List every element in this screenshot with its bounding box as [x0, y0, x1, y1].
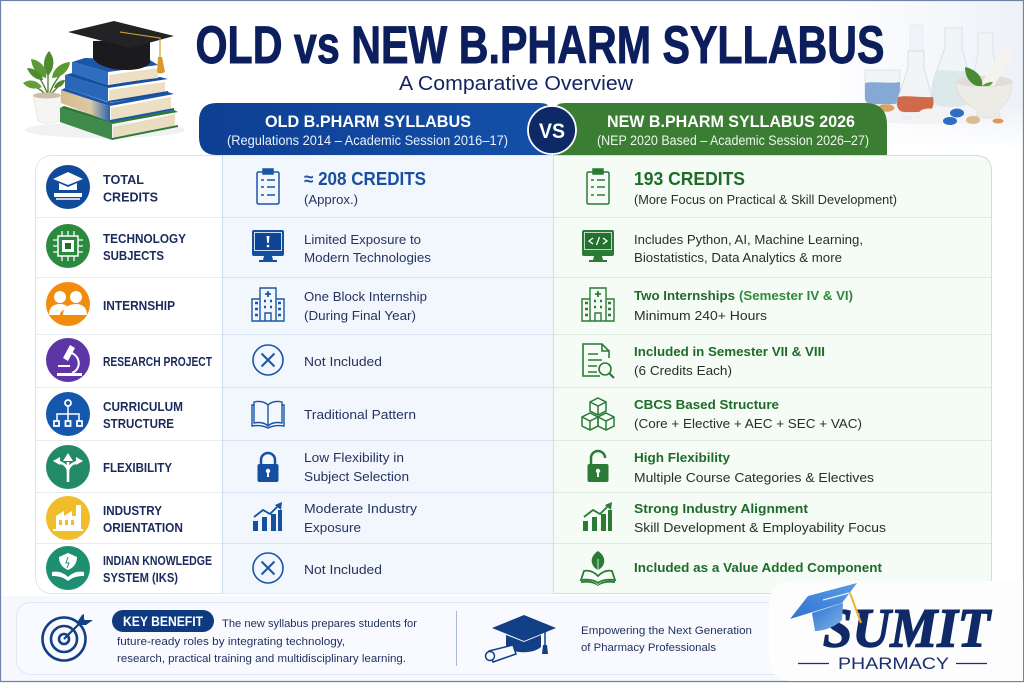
header: old syllabus — [199, 103, 552, 155]
red flask — [897, 51, 934, 112]
old value: One Block Internship — [304, 289, 427, 304]
icon: green hospital — [582, 288, 614, 321]
old value — [304, 289, 427, 323]
tall flask — [932, 28, 971, 106]
row: total credits — [46, 165, 897, 209]
icon: open book — [252, 401, 284, 428]
row: indian knowledge system — [46, 546, 883, 590]
row: industry orientation — [46, 496, 887, 540]
icon: blue hospital — [252, 288, 284, 321]
icon: green leaf and book — [581, 551, 615, 586]
logo subtitle: PHARMACY — [838, 654, 949, 673]
tagline — [581, 625, 752, 654]
new value — [634, 288, 853, 323]
label: INDIAN KNOWLEDGE — [103, 554, 212, 568]
old value — [304, 232, 432, 265]
new value: (6 Credits Each) — [634, 363, 732, 378]
wordmark: SUMIT — [823, 598, 992, 658]
label: SYSTEM (IKS) — [103, 571, 178, 585]
row: research project — [46, 338, 825, 382]
old value: Not Included — [304, 354, 382, 369]
new value: 193 CREDITS — [634, 169, 745, 189]
header: new syllabus: (NEP 2020 Based – Academic Session 2026–27) — [597, 133, 869, 148]
label: CURRICULUM — [103, 400, 183, 414]
key benefit badge: KEY BENEFIT — [123, 614, 204, 629]
key benefit text: The new syllabus prepares students for — [222, 618, 417, 630]
VS badge — [528, 106, 576, 154]
label: TOTAL — [103, 173, 144, 187]
label: STRUCTURE — [103, 417, 174, 431]
old value: (During Final Year) — [304, 308, 416, 323]
label — [103, 173, 158, 204]
label: RESEARCH PROJECT — [103, 355, 212, 369]
label — [103, 232, 187, 263]
key benefit text: research, practical training and multidisciplinary learning. — [117, 653, 406, 665]
comparison table panel — [36, 155, 992, 594]
new value: Minimum 240+ Hours — [634, 308, 768, 323]
icon: open lock — [588, 451, 608, 482]
icon: graduation cap on books — [46, 165, 90, 209]
label: CREDITS — [103, 190, 158, 204]
label: TECHNOLOGY — [103, 232, 187, 246]
new value — [634, 397, 862, 431]
new value: Two Internships — [634, 288, 735, 303]
graduation cap — [68, 21, 174, 74]
VS badge: VS — [539, 120, 565, 143]
icon: chip — [46, 224, 90, 268]
footer panel: key benefit — [16, 602, 816, 674]
old value: Exposure — [304, 520, 361, 535]
icon: green growth chart — [583, 502, 612, 531]
subtitle: A Comparative Overview — [399, 73, 634, 95]
icon: document search — [583, 344, 614, 378]
logo: Sumit Pharmacy — [769, 581, 1023, 681]
old value: ≈ 208 CREDITS — [304, 169, 426, 189]
old value: Subject Selection — [304, 469, 409, 484]
icon: leaf and book — [46, 546, 90, 590]
new value — [634, 169, 897, 207]
tagline: of Pharmacy Professionals — [581, 642, 717, 654]
old value: Moderate Industry — [304, 501, 418, 516]
old value: Low Flexibility in — [304, 450, 404, 465]
row: flexibility — [46, 445, 875, 489]
old value — [304, 501, 418, 535]
new value: Skill Development & Employability Focus — [634, 520, 887, 535]
icon: green clipboard — [587, 169, 609, 204]
faint cylinder — [910, 25, 923, 60]
icon: factory — [46, 496, 90, 540]
old value: Traditional Pattern — [304, 407, 416, 422]
new value: Strong Industry Alignment — [634, 501, 809, 516]
icon: cubes — [582, 398, 614, 430]
tagline: Empowering the Next Generation — [581, 625, 752, 637]
label: SUBJECTS — [103, 249, 164, 263]
label — [103, 504, 183, 535]
header: old syllabus: OLD B.PHARM SYLLABUS — [265, 112, 471, 131]
new value — [634, 501, 887, 535]
label — [103, 400, 183, 431]
new value: (Semester IV & VI) — [739, 288, 853, 303]
row: internship — [46, 282, 853, 326]
header: new syllabus — [553, 103, 887, 155]
old value: Not Included — [304, 562, 382, 577]
old value: Limited Exposure to — [304, 232, 421, 247]
icon: target with arrow — [42, 614, 93, 660]
icon: people — [46, 282, 90, 326]
label — [103, 554, 212, 585]
old value: (Approx.) — [304, 192, 358, 207]
new value: CBCS Based Structure — [634, 397, 779, 412]
new value: Included in Semester VII & VIII — [634, 344, 825, 359]
icon: not included — [253, 553, 283, 583]
key benefit text — [117, 618, 417, 665]
small flask — [973, 33, 998, 80]
key benefit badge — [112, 610, 214, 632]
key benefit text: future-ready roles by integrating technology, — [117, 636, 345, 648]
illustration: lab glassware, mortar and pills — [845, 25, 1015, 125]
new value — [634, 232, 863, 265]
label: INDUSTRY — [103, 504, 163, 518]
label: FLEXIBILITY — [103, 461, 173, 475]
logo graduation cap — [790, 583, 861, 631]
icon: closed lock — [258, 453, 278, 482]
icon: code monitor — [582, 230, 614, 262]
new value — [634, 344, 825, 378]
icon: microscope — [46, 338, 90, 382]
old value: Modern Technologies — [304, 250, 432, 265]
old value — [304, 450, 409, 484]
new value — [634, 450, 875, 485]
pills — [878, 104, 1004, 125]
stacked books — [60, 58, 178, 140]
new value: Included as a Value Added Component — [634, 560, 883, 575]
new value: Includes Python, AI, Machine Learning, — [634, 232, 863, 247]
icon: diverging arrows — [46, 445, 90, 489]
header: old syllabus: (Regulations 2014 – Academic Session 2016–17) — [227, 133, 508, 148]
new value: (More Focus on Practical & Skill Development) — [634, 192, 897, 207]
new value: High Flexibility — [634, 450, 731, 465]
plant pot and leaves — [23, 51, 70, 123]
icon: monitor with warning — [252, 230, 284, 262]
icon: blue growth chart — [253, 502, 282, 531]
label: ORIENTATION — [103, 521, 183, 535]
icon: not included — [253, 345, 283, 375]
illustration: books with graduation cap and plant — [23, 21, 185, 140]
icon: hierarchy — [46, 392, 90, 436]
old value — [304, 169, 426, 207]
icon: blue clipboard — [257, 169, 279, 204]
new value: (Core + Elective + AEC + SEC + VAC) — [634, 416, 862, 431]
new value: Biostatistics, Data Analytics & more — [634, 250, 842, 265]
label: INTERNSHIP — [103, 299, 175, 313]
new value: Multiple Course Categories & Electives — [634, 470, 875, 485]
blue beaker — [865, 70, 900, 104]
mortar and pestle — [956, 54, 1012, 118]
row: technology subjects — [46, 224, 863, 268]
row: curriculum structure — [46, 392, 862, 436]
icon: graduation cap and diploma — [486, 615, 556, 662]
header: new syllabus: NEW B.PHARM SYLLABUS 2026 — [607, 112, 855, 131]
